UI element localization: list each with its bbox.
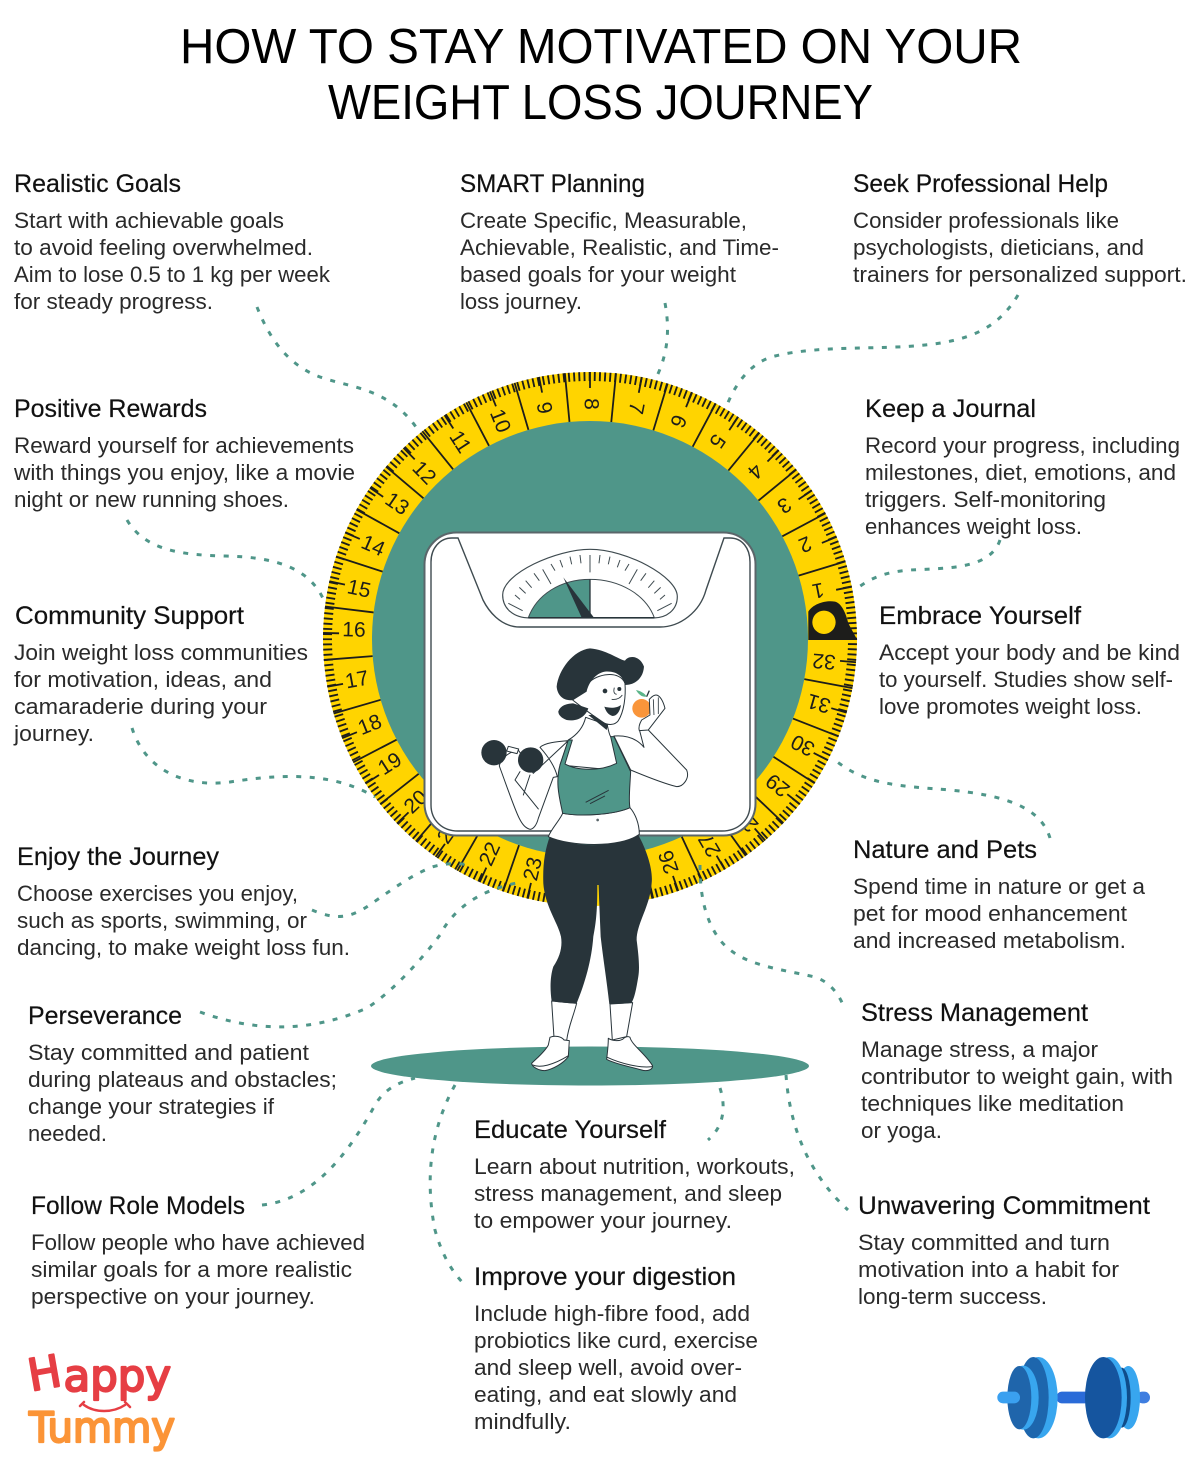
orange bbox=[632, 699, 651, 718]
panel: smart planning: SMART Planning bbox=[460, 170, 645, 198]
panel: unwavering commitment: motivation into a habit for bbox=[858, 1257, 1119, 1282]
panel: enjoy the journey: such as sports, swimming, or bbox=[17, 908, 307, 933]
panel: educate yourself: Learn about nutrition, workouts, bbox=[474, 1154, 795, 1179]
panel: nature and pets: Nature and Pets bbox=[853, 836, 1037, 864]
tape measure tab bbox=[808, 601, 857, 640]
panel: smart planning: based goals for your weight bbox=[460, 262, 736, 287]
panel: nature and pets bbox=[853, 836, 1146, 953]
panel: unwavering commitment bbox=[858, 1192, 1150, 1309]
panel: keep a journal bbox=[865, 395, 1180, 539]
panel: smart planning bbox=[460, 170, 779, 314]
panel: positive rewards bbox=[13, 395, 355, 512]
title: WEIGHT LOSS JOURNEY bbox=[328, 76, 873, 130]
panel: community support bbox=[13, 602, 308, 746]
panel: unwavering commitment: long-term success. bbox=[858, 1284, 1047, 1309]
panel: stress management: Manage stress, a major bbox=[861, 1037, 1098, 1062]
panel: stress management: or yoga. bbox=[861, 1118, 942, 1143]
measuring tape ring: 26 bbox=[654, 847, 684, 877]
teal disc bbox=[372, 421, 808, 857]
measuring tape ring: 8 bbox=[580, 398, 602, 410]
panel: positive rewards: Positive Rewards bbox=[14, 395, 207, 423]
logo: happy tummy: Happy bbox=[24, 1346, 171, 1402]
panel: educate yourself bbox=[474, 1116, 795, 1233]
title: HOW TO STAY MOTIVATED ON YOUR bbox=[180, 20, 1022, 74]
measuring tape ring: 10 bbox=[485, 406, 515, 436]
logo: happy tummy bbox=[24, 1346, 175, 1452]
panel: perseverance: Stay committed and patient bbox=[28, 1040, 309, 1065]
panel: follow role models: Follow people who have achieved bbox=[31, 1230, 365, 1255]
hand bbox=[639, 695, 665, 731]
bent arm holding orange bbox=[614, 729, 688, 787]
scale dial bbox=[503, 549, 677, 618]
measuring tape ring: 29 bbox=[762, 769, 794, 801]
panel: perseverance: during plateaus and obstacles; bbox=[28, 1067, 337, 1092]
measuring tape ring: 12 bbox=[408, 457, 440, 489]
measuring tape ring: 13 bbox=[381, 488, 413, 520]
panel: enjoy the journey: dancing, to make weight loss fun. bbox=[17, 935, 350, 960]
panel: seek professional help: Consider professionals like bbox=[853, 208, 1119, 233]
panel: stress management: techniques like meditation bbox=[861, 1091, 1124, 1116]
panel: realistic goals: Realistic Goals bbox=[14, 170, 181, 198]
panel: realistic goals bbox=[14, 170, 331, 314]
panel: unwavering commitment: Unwavering Commitment bbox=[858, 1192, 1150, 1220]
panel: enjoy the journey: Choose exercises you enjoy, bbox=[17, 881, 298, 906]
panel: educate yourself: Educate Yourself bbox=[474, 1116, 666, 1144]
panel: follow role models: perspective on your journey. bbox=[31, 1284, 315, 1309]
panel: community support: Join weight loss communities bbox=[14, 640, 308, 665]
panel: realistic goals: to avoid feeling overwhelmed. bbox=[14, 235, 313, 260]
panel: perseverance bbox=[28, 1002, 337, 1146]
panel: enjoy the journey: Enjoy the Journey bbox=[17, 843, 220, 871]
panel: improve your digestion: and sleep well, avoid over- bbox=[474, 1355, 742, 1380]
panel: positive rewards: with things you enjoy, like a movie bbox=[13, 460, 355, 485]
hair bbox=[557, 648, 644, 700]
panel: keep a journal: enhances weight loss. bbox=[865, 514, 1082, 539]
panel: follow role models bbox=[31, 1192, 365, 1309]
measuring tape ring: 22 bbox=[475, 839, 505, 869]
panel: nature and pets: Spend time in nature or get a bbox=[853, 874, 1146, 899]
dumbbell bbox=[481, 740, 507, 765]
title bbox=[180, 20, 1022, 130]
panel: seek professional help: trainers for personalized support. bbox=[853, 262, 1187, 287]
panel: keep a journal: Record your progress, including bbox=[865, 433, 1180, 458]
measuring tape ring: 7 bbox=[624, 400, 648, 416]
panel: improve your digestion bbox=[474, 1263, 758, 1434]
panel: community support: camaraderie during your bbox=[14, 694, 267, 719]
measuring tape ring: 32 bbox=[811, 649, 837, 673]
panel: follow role models: Follow Role Models bbox=[31, 1192, 245, 1220]
lower body bbox=[532, 835, 653, 1071]
panel: improve your digestion: probiotics like curd, exercise bbox=[474, 1328, 758, 1353]
panel: community support: journey. bbox=[13, 721, 94, 746]
panel: keep a journal: milestones, diet, emotions, and bbox=[865, 460, 1176, 485]
measuring tape ring: 14 bbox=[358, 531, 389, 561]
panel: improve your digestion: Improve your digestion bbox=[474, 1263, 736, 1291]
measuring tape ring: 3 bbox=[773, 492, 795, 518]
panel: embrace yourself: to yourself. Studies show self- bbox=[879, 667, 1173, 692]
panel: smart planning: Achievable, Realistic, and Time- bbox=[460, 235, 779, 260]
measuring tape ring: 28 bbox=[731, 804, 763, 836]
measuring tape ring: 1 bbox=[810, 578, 826, 602]
tank top bbox=[558, 737, 631, 815]
panel: smart planning: loss journey. bbox=[460, 289, 582, 314]
torso and waist bbox=[548, 808, 639, 844]
panel: realistic goals: Start with achievable goals bbox=[14, 208, 284, 233]
measuring tape ring: 6 bbox=[665, 411, 691, 431]
measuring tape ring: 17 bbox=[343, 667, 371, 693]
measuring tape ring: 30 bbox=[787, 729, 819, 761]
panel: embrace yourself: love promotes weight loss. bbox=[879, 694, 1142, 719]
panel: embrace yourself bbox=[879, 602, 1180, 719]
needle bbox=[563, 577, 594, 618]
measuring tape ring: 18 bbox=[355, 710, 385, 740]
panel: perseverance: change your strategies if bbox=[28, 1094, 275, 1119]
measuring tape ring: 15 bbox=[345, 575, 373, 603]
panel: follow role models: similar goals for a more realistic bbox=[31, 1257, 352, 1282]
panel: perseverance: Perseverance bbox=[28, 1002, 182, 1030]
panel: positive rewards: night or new running shoes. bbox=[14, 487, 289, 512]
panel: embrace yourself: Embrace Yourself bbox=[879, 602, 1081, 630]
woman figure bbox=[481, 648, 688, 1071]
panel: realistic goals: for steady progress. bbox=[14, 289, 213, 314]
measuring tape ring: 20 bbox=[400, 786, 432, 818]
measuring tape ring: 16 bbox=[342, 618, 366, 642]
measuring tape ring: 11 bbox=[444, 427, 476, 457]
panel: seek professional help bbox=[853, 170, 1187, 287]
panel: enjoy the journey bbox=[17, 843, 350, 960]
panel: educate yourself: to empower your journey. bbox=[474, 1208, 732, 1233]
dotted connectors bbox=[127, 295, 1050, 1285]
bathroom scale bbox=[424, 532, 756, 836]
panel: realistic goals: Aim to lose 0.5 to 1 kg per week bbox=[14, 262, 331, 287]
upper body bbox=[481, 648, 688, 844]
panel: seek professional help: psychologists, dieticians, and bbox=[853, 235, 1144, 260]
measuring tape ring: 27 bbox=[694, 829, 726, 861]
logo: happy tummy: Tummy bbox=[28, 1403, 175, 1452]
panel: nature and pets: and increased metabolism. bbox=[853, 928, 1126, 953]
standing shadow bbox=[371, 1046, 809, 1086]
panel: keep a journal: Keep a Journal bbox=[865, 395, 1036, 423]
panel: improve your digestion: mindfully. bbox=[474, 1409, 571, 1434]
icon: blue dumbbell bbox=[997, 1357, 1150, 1438]
panel: embrace yourself: Accept your body and be kind bbox=[879, 640, 1180, 665]
face bbox=[573, 675, 625, 724]
measuring tape ring bbox=[323, 372, 857, 906]
panel: educate yourself: stress management, and sleep bbox=[474, 1181, 782, 1206]
panel: stress management: Stress Management bbox=[861, 999, 1088, 1027]
panel: perseverance: needed. bbox=[28, 1121, 107, 1146]
measuring tape ring: 4 bbox=[743, 459, 767, 483]
measuring tape ring: 21 bbox=[433, 816, 465, 848]
panel: community support: for motivation, ideas, and bbox=[14, 667, 272, 692]
measuring tape ring: 5 bbox=[704, 430, 730, 452]
measuring tape ring: 19 bbox=[374, 748, 406, 780]
measuring tape ring: 23 bbox=[519, 855, 547, 883]
raised arm with dumbbell bbox=[499, 741, 568, 829]
panel: unwavering commitment: Stay committed and turn bbox=[858, 1230, 1110, 1255]
panel: positive rewards: Reward yourself for achievements bbox=[14, 433, 354, 458]
panel: smart planning: Create Specific, Measurable, bbox=[460, 208, 747, 233]
panel: stress management bbox=[861, 999, 1173, 1143]
measuring tape ring: 31 bbox=[805, 689, 833, 717]
panel: community support: Community Support bbox=[15, 602, 244, 630]
measuring tape ring: 2 bbox=[795, 531, 815, 557]
panel: seek professional help: Seek Professional Help bbox=[853, 170, 1108, 198]
panel: keep a journal: triggers. Self-monitoring bbox=[865, 487, 1106, 512]
panel: improve your digestion: eating, and eat slowly and bbox=[474, 1382, 737, 1407]
measuring tape ring: 9 bbox=[532, 400, 556, 416]
panel: improve your digestion: Include high-fibre food, add bbox=[474, 1301, 750, 1326]
panel: nature and pets: pet for mood enhancement bbox=[853, 901, 1127, 926]
panel: stress management: contributor to weight gain, with bbox=[861, 1064, 1173, 1089]
